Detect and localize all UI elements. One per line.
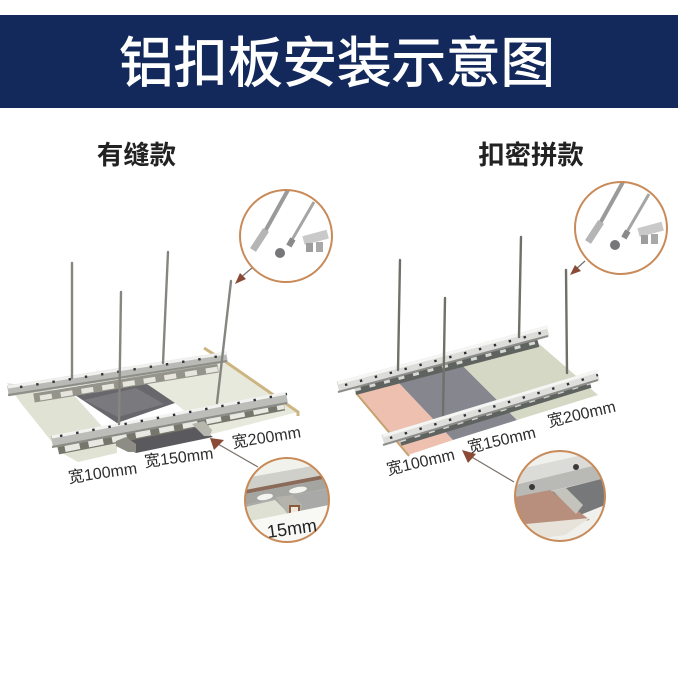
heading: tight-joint type: 扣密拼款: [478, 140, 584, 170]
panel: light left 100mm: [7, 383, 117, 462]
width labels: tight-joint: [385, 398, 617, 479]
callout: joint detail: [515, 450, 605, 542]
panel: green 200mm: [460, 342, 598, 420]
callout: 15mm gap detail: [245, 458, 329, 543]
width labels: tight-joint: 宽200mm: [546, 398, 617, 431]
panel: gray 150mm: [398, 363, 517, 440]
title: 铝扣板安装示意图: [119, 33, 555, 94]
label: 15mm: 15mm: [266, 515, 318, 542]
hanger rods: [398, 237, 567, 415]
width labels: with-gap: [67, 423, 302, 487]
rail: front: [383, 371, 598, 445]
callout: rod parts left: [240, 190, 332, 282]
panel: pink 100mm: [357, 382, 453, 455]
arrow: gap detail left: [210, 438, 258, 467]
connector tube: right: [192, 421, 212, 436]
width labels: tight-joint: 宽100mm: [385, 446, 456, 479]
panel: light right 200mm: [138, 363, 298, 434]
panel edge: tan trim: [356, 393, 409, 456]
rail: back: [8, 353, 227, 398]
title banner: [0, 15, 678, 108]
panel: dark 150mm: [72, 378, 213, 453]
arrow: rod detail right: [570, 261, 585, 275]
arrow: joint detail right: [462, 450, 514, 482]
diagram: with-gap ceiling assembly: [7, 252, 298, 462]
width labels: with-gap: 宽100mm: [67, 459, 138, 487]
hanger rods: [72, 252, 231, 424]
heading: with-gap type: 有缝款: [97, 140, 176, 170]
panel edge: tan trim: [204, 348, 298, 416]
width labels: tight-joint: 宽150mm: [466, 424, 537, 457]
width labels: with-gap: 宽150mm: [143, 445, 214, 471]
arrow: rod detail left: [235, 268, 252, 284]
callout: rod parts right: [575, 182, 667, 274]
width labels: with-gap: 宽200mm: [231, 423, 302, 452]
connector tube: front: [116, 437, 136, 452]
diagram: tight-joint ceiling assembly: [338, 237, 598, 456]
rail: front: [52, 393, 287, 449]
rail: back: [338, 327, 548, 392]
